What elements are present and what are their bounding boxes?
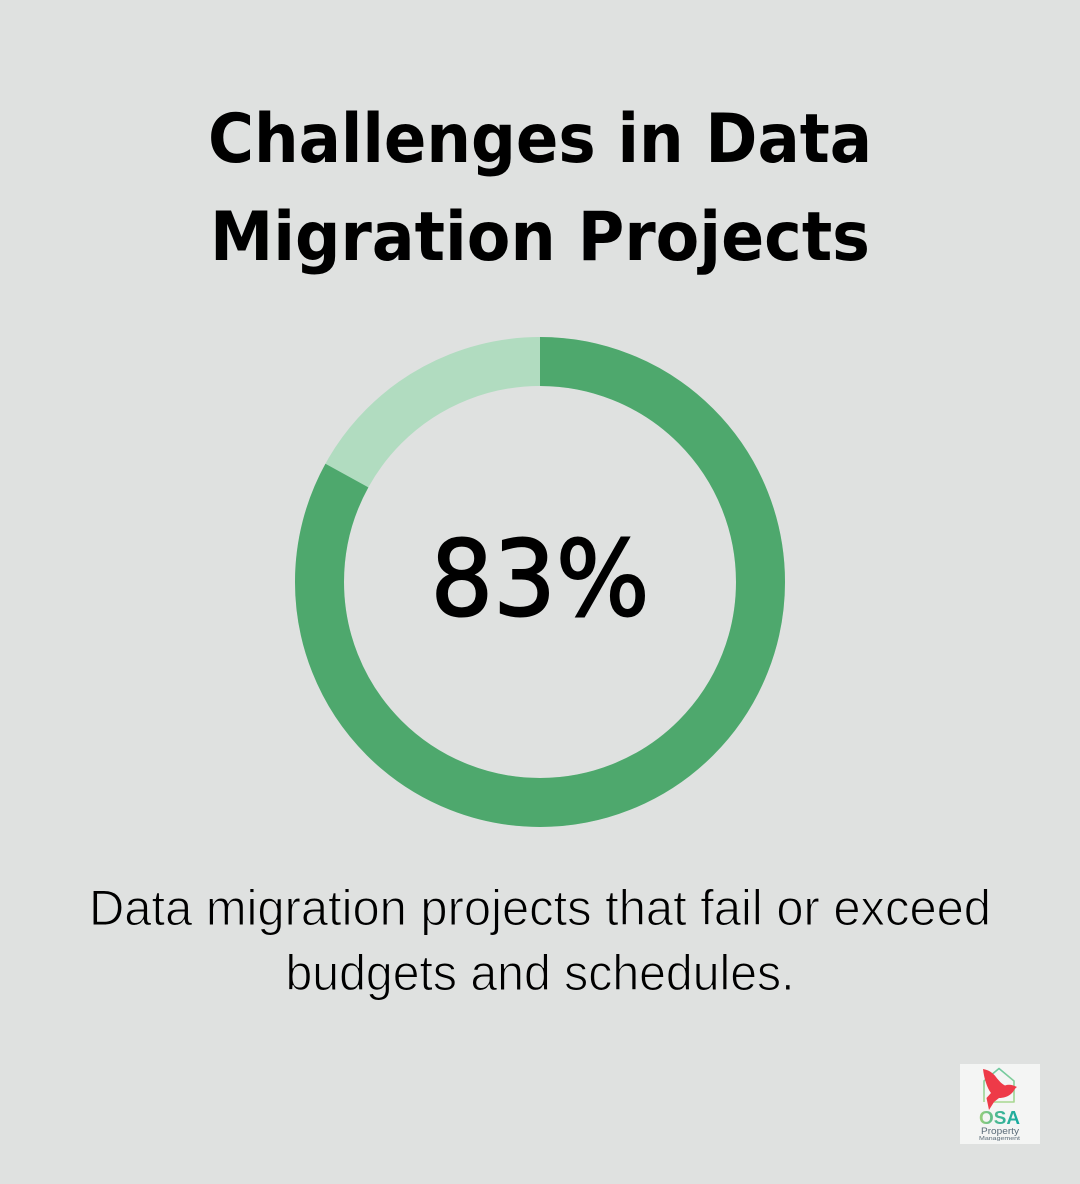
title: Migration Projects [210,198,870,277]
description [89,880,991,1001]
logo subtitle second line: Management [979,1136,1021,1142]
logo wordmark: OSA [979,1108,1020,1128]
icon: house outline [984,1068,1014,1102]
donut chart: 83% [320,362,760,802]
icon: red bird [983,1069,1017,1110]
logo: OSA Property Management [960,1064,1040,1144]
title [208,100,872,277]
description: Data migration projects that fail or exceed [89,880,991,936]
big number: 83% [430,518,650,640]
title: Challenges in Data [208,100,872,179]
description: budgets and schedules. [286,945,794,1001]
logo subtitle: Property [981,1126,1019,1137]
